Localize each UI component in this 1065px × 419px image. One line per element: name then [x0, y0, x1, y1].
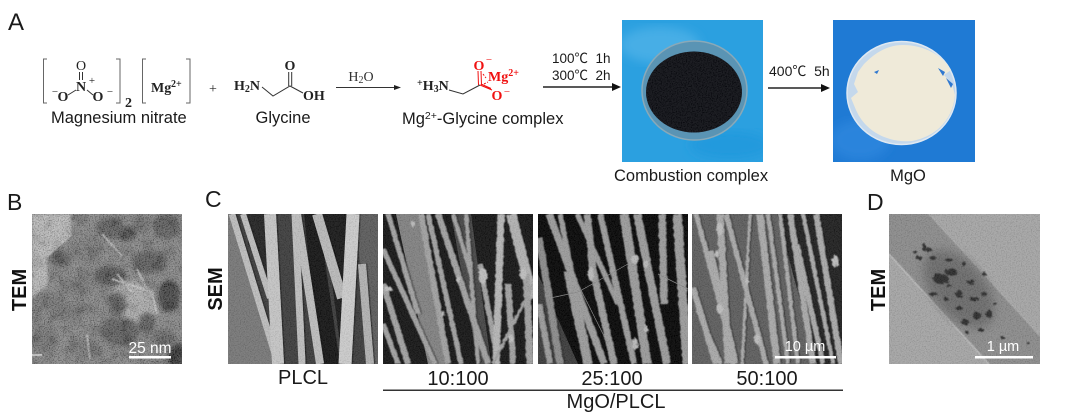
- chemical: magnesium nitrate structure: −: [107, 86, 113, 98]
- chemical: Mg-glycine complex structure: −: [504, 86, 510, 98]
- scale bar: 10 µm: [775, 339, 836, 358]
- chemical: Mg-glycine complex structure: H: [423, 79, 434, 94]
- arrow: first heating step: 300℃ 2h: [552, 68, 611, 83]
- label: Mg-glycine complex: -Glycine complex: [437, 110, 564, 128]
- scale bar: 10 µm: 10 µm: [785, 339, 825, 355]
- chemical: magnesium nitrate structure: O: [93, 90, 104, 105]
- arrow: first heating step: 100℃ 1h: [552, 51, 611, 66]
- chemical: glycine structure: [234, 59, 325, 104]
- chemical: Mg-glycine complex structure: O: [492, 89, 503, 104]
- micrograph: PLCL fibers: [228, 214, 378, 364]
- panel label: C: C: [205, 186, 222, 212]
- arrow: first heating step: [543, 51, 621, 91]
- chemical: Mg-glycine complex structure: [417, 54, 519, 104]
- label: combustion complex: Combustion complex: [614, 167, 769, 185]
- label: Mg-glycine complex: 2+: [425, 110, 437, 122]
- axis label: SEM: SEM: [205, 267, 227, 311]
- axis label: TEM B: TEM: [9, 269, 31, 311]
- scale bar: 25 nm: [32, 340, 172, 358]
- arrow: water reaction: H: [348, 70, 358, 85]
- chemical: glycine structure: H: [234, 79, 245, 94]
- panel label: B: B: [7, 189, 22, 215]
- micrograph: 10:100 fibers: [383, 214, 533, 364]
- micrograph: TEM of MgO: [32, 214, 182, 364]
- chemical: magnesium nitrate structure: [44, 59, 190, 111]
- arrow: second heating step: [768, 63, 830, 92]
- label: glycine: Glycine: [255, 109, 311, 127]
- chemical: Mg-glycine complex structure: 3: [434, 84, 439, 95]
- micrograph: 50:100 fibers: [692, 214, 842, 364]
- chemical: Mg-glycine complex structure: Mg: [488, 70, 508, 85]
- scale bar: 1 µm: 1 µm: [987, 339, 1019, 355]
- scale bar: 25 nm: 25 nm: [128, 340, 172, 357]
- label: magnesium nitrate: Magnesium nitrate: [51, 109, 187, 127]
- chemical: magnesium nitrate structure: 2: [125, 96, 132, 111]
- label: 25:100: 25:100: [581, 368, 643, 390]
- label: PLCL: PLCL: [278, 367, 328, 389]
- arrow: second heating step: 400℃ 5h: [769, 63, 830, 79]
- label: Mg-glycine complex: Mg: [402, 110, 425, 128]
- chemical: Mg-glycine complex structure: +: [417, 78, 423, 89]
- chemical: magnesium nitrate structure: −: [52, 86, 58, 98]
- label: MgO/PLCL: MgO/PLCL: [567, 391, 665, 413]
- chemical: Mg-glycine complex structure: N: [439, 79, 449, 94]
- axis label: TEM D: TEM: [868, 269, 890, 311]
- arrow: water reaction: [336, 70, 401, 90]
- label: MgO: MgO: [890, 167, 926, 185]
- arrow: water reaction: O: [364, 70, 374, 85]
- chemical: magnesium nitrate structure: Mg: [151, 81, 171, 96]
- chemical: glycine structure: OH: [303, 89, 325, 104]
- chemical: glycine structure: O: [285, 59, 296, 74]
- plus sign: +: [209, 82, 217, 97]
- panel label: D: D: [867, 189, 884, 215]
- chemical: glycine structure: N: [250, 79, 260, 94]
- scale bar: 1 µm: [975, 339, 1033, 358]
- chemical: Mg-glycine complex structure: −: [486, 54, 492, 66]
- label: 10:100: 10:100: [427, 368, 489, 390]
- arrow: water reaction: 2: [358, 75, 364, 86]
- chemical: glycine structure: 2: [245, 84, 250, 95]
- micrograph: 25:100 fibers: [538, 214, 688, 364]
- label: 50:100: 50:100: [736, 368, 798, 390]
- chemical: magnesium nitrate structure: O: [58, 90, 69, 105]
- chemical: Mg-glycine complex structure: 2+: [508, 68, 519, 79]
- micrograph: TEM of fiber with MgO: [889, 214, 1040, 364]
- photo: combustion complex: [622, 20, 763, 162]
- panel label: A: A: [8, 9, 24, 36]
- chemical: magnesium nitrate structure: +: [89, 75, 95, 87]
- photo: MgO powder: [833, 20, 975, 162]
- chemical: magnesium nitrate structure: O: [76, 59, 86, 74]
- group bracket line: [383, 390, 843, 391]
- chemical: magnesium nitrate structure: 2+: [171, 79, 182, 90]
- chemical: magnesium nitrate structure: N: [76, 80, 86, 95]
- chemical: Mg-glycine complex structure: O: [474, 59, 485, 74]
